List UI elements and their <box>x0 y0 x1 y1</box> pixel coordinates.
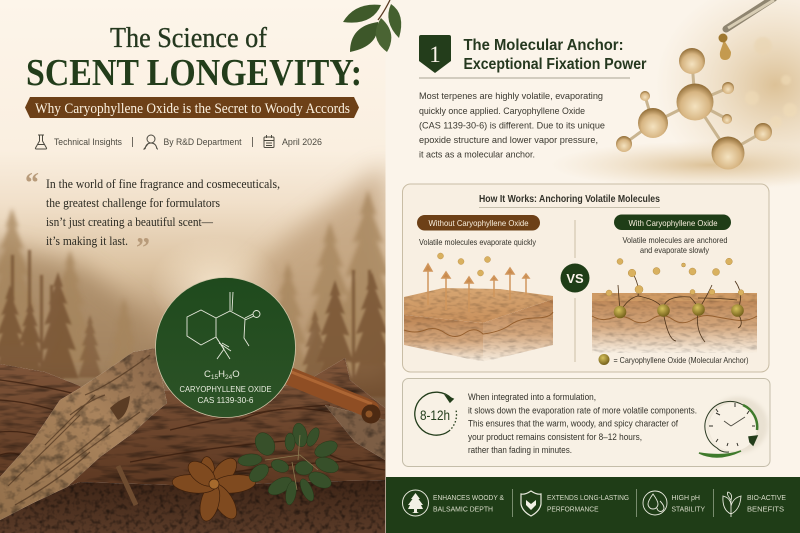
right: with <box>592 214 757 365</box>
title: The Science of <box>110 22 267 54</box>
section heading: The Molecular Anchor: <box>464 37 624 54</box>
molecule circle badge: CAS 1139-30-6 <box>198 396 254 405</box>
misty hills <box>250 160 386 386</box>
benefit: shield: EXTENDS LONG-LASTING <box>547 493 629 502</box>
right: with: and evaporate slowly <box>640 245 710 255</box>
quote block: “ <box>25 168 39 199</box>
left: without: Volatile molecules evaporate quickly <box>419 237 537 247</box>
left: without <box>404 215 553 362</box>
divider and VS badge <box>560 220 590 362</box>
icon: calendar <box>264 135 274 148</box>
skin block left <box>404 288 553 362</box>
benefit: bio leaves: BIO-ACTIVE <box>747 493 786 502</box>
molecule circle badge: 24 <box>225 374 233 381</box>
panel: how it works <box>402 184 769 372</box>
benefit: bio leaves: BENEFITS <box>747 504 784 514</box>
panel: how it works: How It Works: Anchoring Volatile Molecules <box>479 194 660 205</box>
footer band <box>386 477 800 533</box>
benefit: drops <box>643 491 705 515</box>
anchor molecules <box>614 306 626 318</box>
benefit: woody: ENHANCES WOODY & <box>433 493 504 502</box>
icon: clock <box>699 397 768 457</box>
section heading: Exceptional Fixation Power <box>464 56 646 73</box>
intro text: epoxide structure and lower vapor pressure, <box>419 135 598 145</box>
meta row <box>35 135 322 149</box>
intro text: quickly once applied. Caryophyllene Oxide <box>419 106 585 116</box>
quote block: it’s making it last. <box>46 234 128 248</box>
benefit: drops: STABILITY <box>672 504 705 514</box>
intro text <box>419 91 605 160</box>
legend: = Caryophyllene Oxide (Molecular Anchor) <box>614 355 749 365</box>
anchor tethers <box>618 272 741 342</box>
quote block: the greatest challenge for formulators <box>46 196 220 210</box>
bark slab <box>325 405 385 460</box>
driftwood <box>0 348 167 520</box>
quote block <box>25 168 280 264</box>
molecule circle badge: CARYOPHYLLENE OXIDE <box>180 385 272 394</box>
meta row: By R&D Department <box>164 137 242 147</box>
panel: 8-12h longevity <box>402 378 770 466</box>
title <box>26 22 362 94</box>
molecule circle badge: H <box>218 369 225 380</box>
body text: it slows down the evaporation rate of more volatile components. <box>468 406 697 416</box>
back logs <box>0 358 385 495</box>
soil ground <box>0 480 385 533</box>
body text: rather than fading in minutes. <box>468 445 572 455</box>
intro text: (CAS 1139-30-6) is different. Due to its unique <box>419 120 605 130</box>
twig <box>118 466 136 505</box>
molecule circle badge: O <box>232 369 240 380</box>
evaporation arrows <box>424 264 529 312</box>
number badge <box>419 35 451 73</box>
title: SCENT LONGEVITY: <box>26 52 362 94</box>
meta row: April 2026 <box>282 137 322 147</box>
panel: left forest scene <box>0 0 402 533</box>
benefit: bio leaves <box>723 492 786 517</box>
foreground tree clusters <box>0 250 396 397</box>
icon: people <box>144 135 158 149</box>
star anise <box>171 454 257 523</box>
dropper <box>726 0 774 29</box>
intro text: it acts as a molecular anchor. <box>419 150 535 160</box>
icon: 8-12h timer: 8-12h <box>420 407 450 423</box>
divider and VS badge: VS <box>566 271 584 286</box>
quote block: In the world of fine fragrance and cosmeceuticals, <box>46 177 280 191</box>
chemical structure <box>187 292 260 359</box>
floating molecules <box>438 253 490 276</box>
right: with: With Caryophyllene Oxide <box>628 218 718 228</box>
body text: This ensures that the warm, woody, and spicy character of <box>468 418 679 428</box>
body text <box>468 392 697 455</box>
body text: When integrated into a formulation, <box>468 392 596 402</box>
benefit: woody: BALSAMIC DEPTH <box>433 504 493 514</box>
icon: leaves top <box>343 0 401 52</box>
green herb sprig <box>238 422 341 506</box>
quote block: isn’t just creating a beautiful scent— <box>46 215 213 229</box>
meta row: Technical Insights <box>54 137 122 147</box>
right: with: Volatile molecules are anchored <box>622 235 728 245</box>
benefit: drops: HIGH pH <box>672 493 700 502</box>
subtitle ribbon: Why Caryophyllene Oxide is the Secret to Woody Accords <box>35 101 350 117</box>
molecule circle badge <box>156 278 296 418</box>
body text: your product remains consistent for 8–12 hours, <box>468 432 642 442</box>
icon: 8-12h timer <box>415 392 457 435</box>
intro text: Most terpenes are highly volatile, evaporating <box>419 91 603 101</box>
skin block right <box>592 293 757 353</box>
quote block: ” <box>136 233 150 264</box>
benefit: woody <box>402 490 504 516</box>
benefit: shield: PERFORMANCE <box>547 504 598 514</box>
molecule circle badge: 15 <box>211 374 218 381</box>
icon: flask <box>35 135 47 149</box>
section heading <box>419 35 646 78</box>
benefit: shield <box>521 491 629 516</box>
gold molecule illustration <box>574 0 800 184</box>
left: without: Without Caryophyllene Oxide <box>428 218 529 228</box>
misty distant trees <box>0 191 386 372</box>
cinnamon stick <box>289 371 380 424</box>
molecule circle badge: C <box>204 369 211 380</box>
floating molecules <box>606 258 744 296</box>
number badge: 1 <box>429 42 441 67</box>
